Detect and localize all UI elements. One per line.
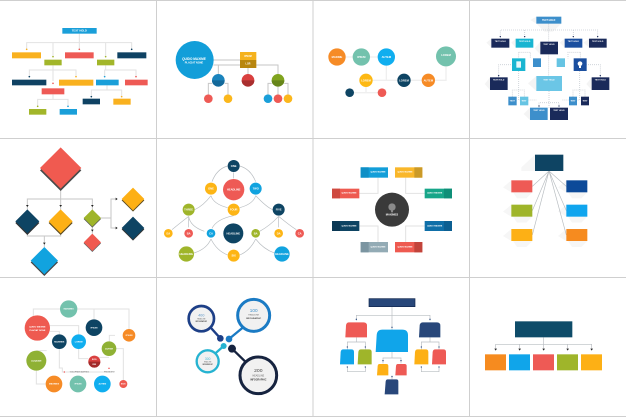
boxes: TEXT HOLD [519, 41, 531, 43]
panel: one-to-six boxes [503, 155, 587, 247]
ring 300: HEADLINE [204, 361, 211, 364]
banners: QUIDO MAXIME [370, 245, 386, 248]
stacked box [240, 52, 256, 68]
boxes: TEXT [521, 100, 527, 102]
ring 200 [240, 357, 277, 394]
legend labels [64, 368, 116, 374]
boxes: TEXT HOLD [533, 110, 545, 112]
circles: HEADLINE [227, 231, 240, 235]
boxes: TEXT HOLD [543, 80, 555, 82]
circles: LOREM [361, 78, 372, 82]
circles: HEADLINE [227, 188, 241, 192]
root box [515, 321, 572, 337]
child circles [204, 74, 292, 103]
ring 400 [189, 306, 214, 331]
panel: diamond flowchart [15, 147, 144, 276]
connectors [212, 328, 245, 361]
ring 400: HEADLINE [197, 317, 206, 320]
boxes [490, 39, 609, 120]
connector dots [498, 36, 601, 107]
ring 200: 200 [254, 368, 263, 374]
boxes: TEXT HOLD [553, 110, 565, 112]
circles: LOREM [399, 78, 410, 82]
large circle: QUIDO MAXIME [182, 57, 206, 61]
circles: MAXIMES [64, 308, 74, 311]
circles: EA [166, 231, 170, 235]
large circle [176, 41, 214, 79]
panel: blue flowchart with dotted connectors [485, 17, 609, 120]
circles: IPSUM [91, 327, 98, 329]
stacked box: IPSUM [244, 56, 252, 58]
top bar [369, 299, 415, 307]
rounded trapezoid shapes [340, 322, 446, 394]
circles: REI [93, 364, 97, 366]
hub circle: MAXIMES [386, 212, 398, 216]
large circle: PLACIAT NONE [185, 62, 204, 65]
circles: BA [254, 231, 258, 235]
soft shadows [485, 17, 592, 120]
boxes: TEXT HOLD [495, 41, 507, 43]
panel: flowchart of rectangles [12, 28, 148, 115]
root box [535, 155, 563, 171]
banners: QUIDO MAXIME [397, 245, 413, 248]
circles: ONE [208, 187, 214, 191]
ring 100: 100 [250, 308, 258, 313]
circles: IPSUM [357, 55, 366, 59]
panel: circle hierarchy [176, 41, 292, 103]
boxes: TEXT [510, 100, 516, 102]
circles: FIVE [276, 208, 282, 212]
banners [332, 167, 452, 252]
ring 300 [197, 350, 219, 372]
ring 300: INFOGRAPHIC [202, 363, 214, 366]
circles: AUTEM [98, 383, 106, 386]
arrowheads [494, 349, 593, 351]
circles: ONE [231, 164, 237, 168]
circles: BA [187, 231, 191, 235]
circles: LOREM [75, 341, 83, 343]
boxes: TEXT HOLD [543, 44, 555, 46]
soft shadows [503, 155, 587, 247]
circles: TWO [253, 187, 259, 191]
ring 100: HEADLINE [248, 313, 260, 316]
ring 400: INFOGRAPHIC [196, 320, 208, 323]
circles: AUTEM [424, 78, 434, 82]
ring 300: 300 [205, 357, 211, 361]
boxes: TEXT HOLD [568, 41, 580, 43]
arrow dots [347, 319, 440, 377]
banners: QUIDO MAXIME [397, 171, 413, 174]
panel: circle pyramid [164, 160, 304, 262]
panel: one-to-five boxes [485, 321, 602, 370]
circles: MAXIMES [54, 340, 65, 343]
circles: HEADLINE [180, 252, 193, 256]
circles: IPSUM [75, 384, 82, 386]
circles: AUTEM [105, 347, 113, 350]
circles: CA [298, 231, 302, 235]
circles [164, 160, 304, 262]
banners: QUIDO MAXIME [341, 224, 357, 227]
diamonds with shadow [15, 147, 144, 276]
circles: PLACIAT NONE [29, 329, 46, 332]
circles: EOS [92, 359, 97, 361]
boxes: TEXT [570, 100, 576, 102]
title box: TEXT HOLD [72, 29, 87, 33]
circles: LOREM [441, 53, 452, 57]
boxes: TEXT HOLD [592, 41, 604, 43]
circles: DA [277, 231, 281, 235]
arrowheads [26, 198, 118, 245]
child boxes [485, 354, 602, 370]
ring 100: INFOGRAPHIC [246, 317, 262, 320]
circles: CA [209, 231, 213, 235]
circles: QUIDO MAXIME [29, 326, 46, 329]
stacked box: LOR [246, 64, 251, 66]
panel: hierarchy of rounded shapes [340, 299, 446, 394]
nodes [217, 335, 236, 353]
circles [25, 300, 135, 392]
circles: MAXIME [332, 55, 343, 59]
banners: QUIDO MAXIME [427, 192, 443, 195]
ring 200: HEADLINE [253, 375, 265, 378]
banners: QUIDO MAXIME [341, 192, 357, 195]
boxes: TEXT HOLD [493, 80, 505, 82]
panel: network of circles [25, 300, 135, 392]
circles: ALIQUAM [31, 359, 42, 362]
legend labels: PROVIDENT [104, 372, 116, 374]
child boxes [511, 180, 587, 241]
circles: AUTEM [382, 55, 392, 59]
icons [516, 61, 582, 68]
circles [328, 46, 456, 97]
ring 100 [238, 299, 270, 331]
marker dots [26, 48, 137, 107]
circles: IPSUM [126, 335, 133, 337]
panel: central hub with banners [332, 167, 452, 252]
banners: QUIDO MAXIME [370, 171, 386, 174]
circles: FOUR [230, 208, 238, 212]
ring 200: INFOGRAPHIC [250, 378, 267, 381]
boxes: TEXT HOLD [595, 80, 607, 82]
ring 400: 400 [198, 313, 204, 317]
banners: QUIDO MAXIME [427, 224, 443, 227]
circles: SIX [232, 254, 236, 258]
legend labels: VOLUPTATE ADIPISCI [70, 371, 89, 374]
top box: TEXT HOLD [542, 20, 556, 22]
circles: THREE [184, 208, 193, 212]
circles: MAXIMES [49, 383, 60, 386]
flow boxes [12, 52, 148, 115]
circles: HEADLINE [275, 252, 289, 256]
panel: connected circles [328, 46, 456, 97]
boxes: TEXT [582, 100, 588, 102]
circles: EOS [121, 384, 126, 386]
panel: metaball rings [189, 299, 277, 394]
